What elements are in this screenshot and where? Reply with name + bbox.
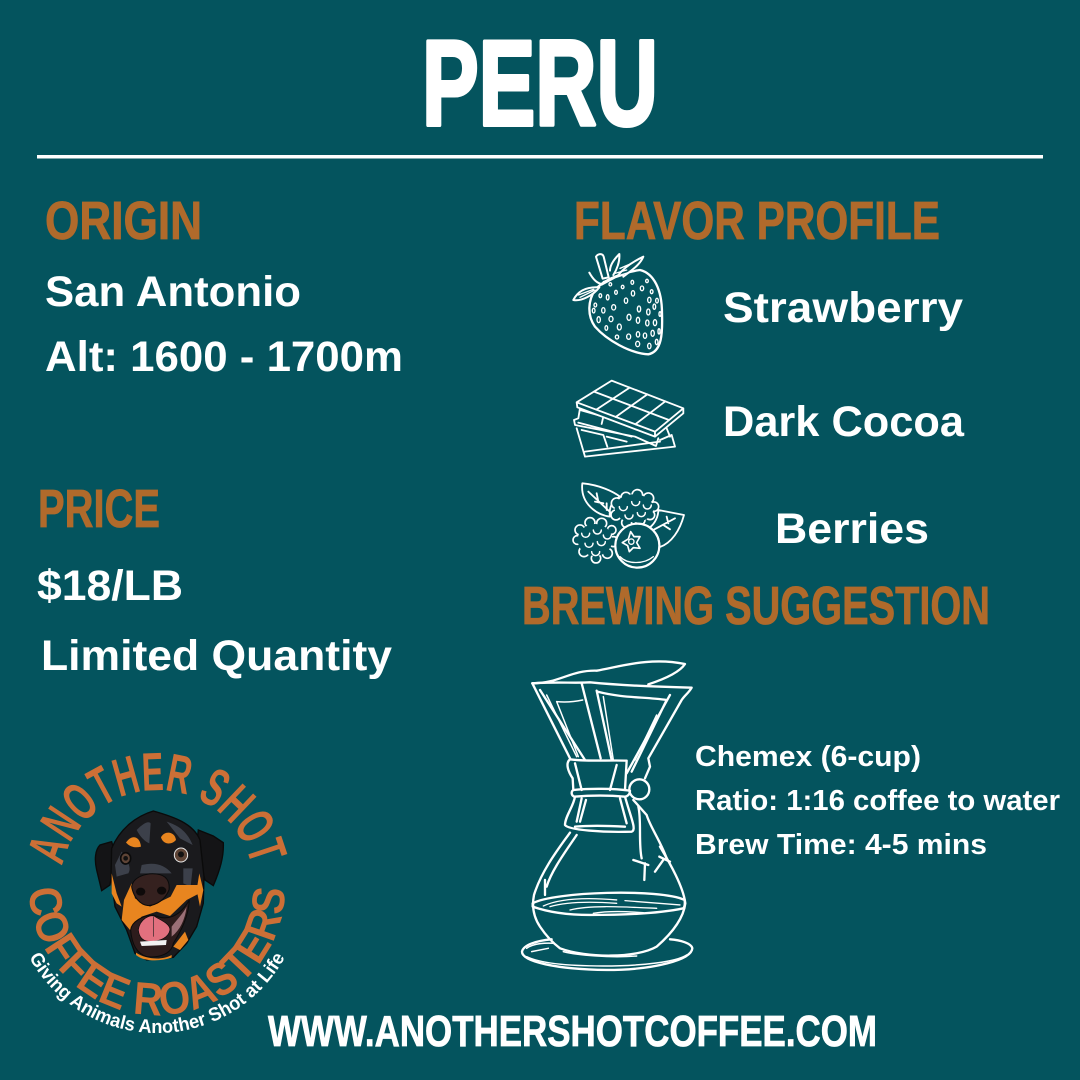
availability note: Limited Quantity bbox=[41, 632, 392, 680]
flavor label: berries: Berries bbox=[775, 505, 929, 553]
panel: origin bbox=[45, 191, 403, 381]
price value: $18/LB bbox=[37, 562, 183, 610]
icon: strawberry bbox=[573, 254, 662, 354]
heading: origin: ORIGIN bbox=[45, 191, 202, 251]
logo text: coffee roasters: COFFEE ROASTERS bbox=[30, 888, 285, 1016]
origin region: San Antonio bbox=[45, 268, 301, 316]
logo text: another shot: ANOTHER SHOT bbox=[30, 752, 288, 866]
icon: chemex coffee maker bbox=[522, 661, 692, 970]
icon: rottweiler head bbox=[95, 811, 223, 960]
heading: flavor profile: FLAVOR PROFILE bbox=[574, 191, 940, 251]
brew time: Brew Time: 4-5 mins bbox=[695, 829, 987, 861]
logo: another shot coffee roasters bbox=[30, 752, 288, 1033]
icon: chocolate bar bbox=[574, 381, 683, 457]
logo tagline: Giving Animals Another Shot at Life bbox=[31, 953, 284, 1033]
panel: brewing suggestion bbox=[522, 576, 1060, 970]
flavor label: dark cocoa: Dark Cocoa bbox=[723, 398, 965, 446]
panel: flavor profile bbox=[573, 191, 965, 568]
brew ratio: Ratio: 1:16 coffee to water bbox=[695, 785, 1060, 817]
heading: price: PRICE bbox=[38, 479, 160, 539]
origin altitude: Alt: 1600 - 1700m bbox=[45, 333, 403, 381]
website url: WWW.ANOTHERSHOTCOFFEE.COM bbox=[268, 1007, 877, 1056]
title: PERU bbox=[422, 15, 658, 151]
flavor label: strawberry: Strawberry bbox=[723, 284, 963, 332]
icon: berries bbox=[573, 483, 684, 568]
brew method: Chemex (6-cup) bbox=[695, 741, 921, 773]
panel: price bbox=[37, 479, 392, 680]
